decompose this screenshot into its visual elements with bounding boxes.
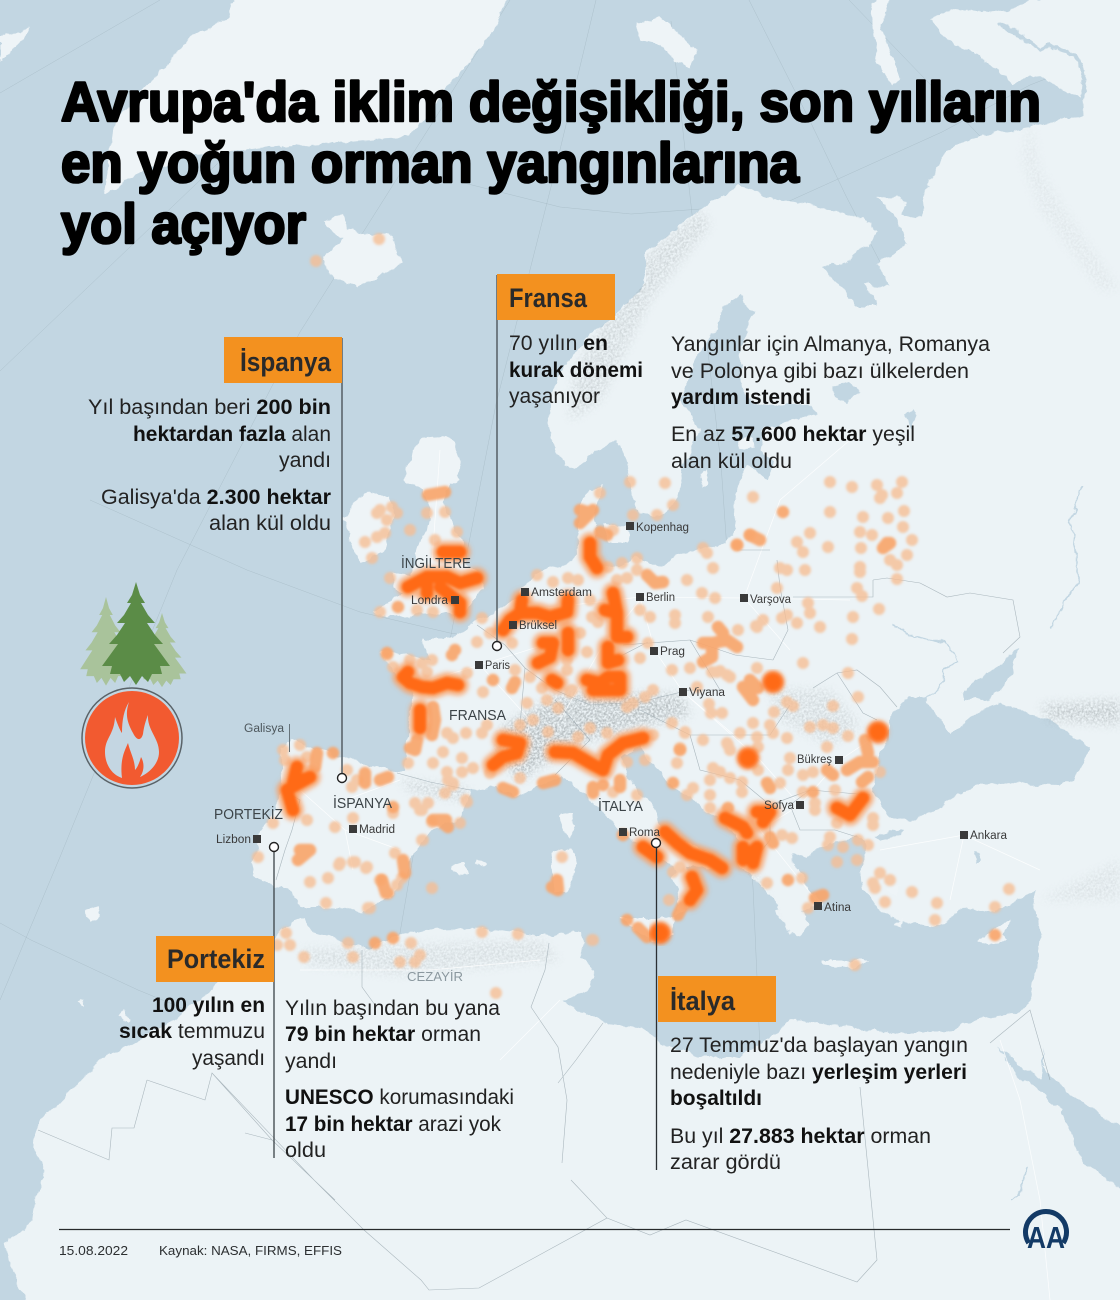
city labels: Amsterdam [531, 587, 592, 599]
city labels [216, 522, 1008, 914]
panel: Fransa: 70 yılın en [509, 332, 608, 355]
city labels: Varşova [750, 594, 792, 606]
icon: flame badge [82, 688, 182, 788]
city labels: Sofya [764, 800, 795, 812]
medium fire points [298, 492, 995, 943]
city labels: Roma [629, 827, 661, 839]
mountain shading [300, 120, 1120, 975]
city labels: Galisya [244, 723, 285, 735]
panel: Fransa: kurak dönemi [509, 359, 643, 382]
intense fire blobs [660, 682, 878, 933]
panel: İspanya: Yıl başından beri 200 bin [88, 396, 331, 419]
panel: Portekiz: sıcak temmuzu [119, 1020, 265, 1043]
panel: Portekiz: UNESCO korumasındaki [285, 1086, 514, 1109]
panel: İspanya: hektardan fazla alan [133, 423, 331, 446]
inland and enclosed seas [833, 170, 1120, 1195]
panel: Fransa: Yangınlar için Almanya, Romanya [671, 333, 990, 356]
panel: İtalya: Bu yıl 27.883 hektar orman [670, 1125, 931, 1148]
footer rule [59, 1228, 1010, 1230]
city markers [253, 522, 968, 910]
country labels: FRANSA [449, 708, 506, 724]
pale fire points [258, 239, 1009, 993]
panel: Portekiz: yaşandı [192, 1047, 265, 1070]
panel: İspanya: yandı [279, 449, 331, 472]
panel: İtalya: 27 Temmuz'da başlayan yangın [670, 1034, 968, 1057]
city labels: Madrid [359, 824, 395, 836]
city labels: Londra [411, 595, 449, 607]
city labels: Paris [485, 660, 510, 672]
panel: Portekiz [119, 842, 514, 1162]
icon: AA logo: AA [1027, 1220, 1065, 1255]
city labels: Brüksel [519, 620, 557, 632]
panel: İtalya: zarar gördü [670, 1151, 781, 1174]
panel: Portekiz: 100 yılın en [152, 994, 265, 1017]
city labels: Berlin [646, 592, 675, 604]
country labels [214, 554, 643, 984]
panel: Portekiz: oldu [285, 1139, 326, 1162]
city labels: Kopenhag [636, 522, 689, 534]
panel: Portekiz: Yılın başından bu yana [285, 997, 500, 1020]
panel: İspanya: Galisya'da 2.300 hektar [101, 486, 331, 509]
rivers and lakes [893, 25, 1085, 1200]
country labels: PORTEKİZ [214, 805, 283, 823]
footer date: 15.08.2022 [59, 1243, 128, 1258]
roads and minor rivers [300, 440, 1050, 1300]
panel: Portekiz: Portekiz [167, 944, 265, 974]
panel: Fransa: yardım istendi [671, 386, 811, 409]
borders [38, 550, 1050, 1290]
panel: İtalya: nedeniyle bazı yerleşim yerleri [670, 1061, 967, 1084]
place labels [214, 522, 1008, 984]
title: en yoğun orman yangınlarına [61, 131, 800, 194]
city labels: Viyana [689, 687, 726, 699]
country labels: İSPANYA [333, 794, 392, 812]
islands and northern lands [0, 0, 1012, 1021]
panel: Portekiz: yandı [285, 1050, 337, 1073]
city labels: Atina [824, 902, 852, 914]
panel: İtalya: boşaltıldı [670, 1087, 762, 1110]
panel: Fransa [492, 274, 990, 650]
panel: İspanya: İspanya [240, 347, 332, 377]
city labels: Bükreş [797, 754, 832, 766]
intense fire clusters core [287, 543, 863, 900]
fire hotspots [258, 239, 1009, 993]
icon: trees [80, 582, 186, 687]
panel: Portekiz: 79 bin hektar orman [285, 1023, 481, 1046]
panel: İspanya [88, 337, 346, 782]
panel: İtalya: İtalya [670, 986, 736, 1016]
city labels: Prag [660, 646, 685, 658]
country labels: CEZAYİR [407, 969, 463, 984]
panel: Fransa: Fransa [509, 283, 588, 313]
city labels: Lizbon [216, 834, 251, 846]
title [61, 70, 1041, 255]
panel: Fransa: alan kül oldu [671, 450, 792, 473]
footer source: Kaynak: NASA, FIRMS, EFFIS [159, 1243, 342, 1258]
panel: Portekiz: 17 bin hektar arazi yok [285, 1113, 501, 1136]
panel: İspanya: alan kül oldu [209, 512, 331, 535]
panel: Fransa: yaşanıyor [509, 385, 600, 408]
panel: Fransa: ve Polonya gibi bazı ülkelerden [671, 360, 969, 383]
title: Avrupa'da iklim değişikliği, son yılların [61, 70, 1041, 133]
country labels: İTALYA [598, 797, 643, 815]
panel: Fransa: En az 57.600 hektar yeşil [671, 423, 915, 446]
intense fire clusters halo [287, 543, 878, 933]
title: yol açıyor [61, 192, 306, 255]
Galisya pointer [288, 724, 290, 752]
panel: İtalya [652, 838, 968, 1174]
city labels: Ankara [970, 830, 1008, 842]
country labels: İNGİLTERE [401, 554, 471, 572]
